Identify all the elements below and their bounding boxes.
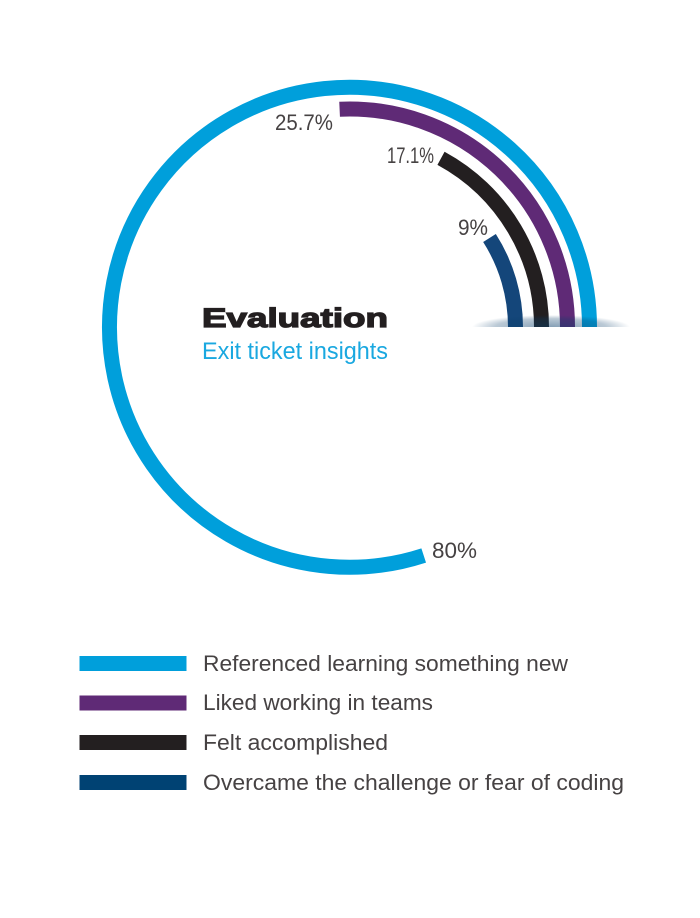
legend item: challenge: Overcame the challenge or fear of coding: [203, 770, 624, 795]
arc: overcame the challenge 9%: [490, 238, 516, 327]
subtitle: Exit ticket insights: [202, 338, 388, 365]
legend: [80, 651, 624, 795]
label: 25.7%: 25.7%: [275, 110, 333, 135]
legend item: teams: [80, 690, 433, 715]
arc: felt accomplished 17.1%: [441, 158, 542, 327]
arc: referenced learning something new 80%: [110, 87, 590, 567]
radial chart: [110, 87, 630, 567]
title: Evaluation: [202, 303, 388, 333]
legend item: accomplished: Felt accomplished: [203, 730, 388, 755]
arc: liked working in teams 25.7%: [340, 109, 568, 327]
label: 9%: 9%: [458, 215, 488, 240]
legend item: accomplished: [80, 730, 388, 755]
baseline shadow: [472, 315, 630, 327]
label: 17.1%: 17.1%: [387, 143, 434, 168]
label: 80%: 80%: [432, 538, 477, 563]
legend item: learned something new: Referenced learning something new: [203, 651, 568, 676]
legend item: teams: Liked working in teams: [203, 690, 433, 715]
